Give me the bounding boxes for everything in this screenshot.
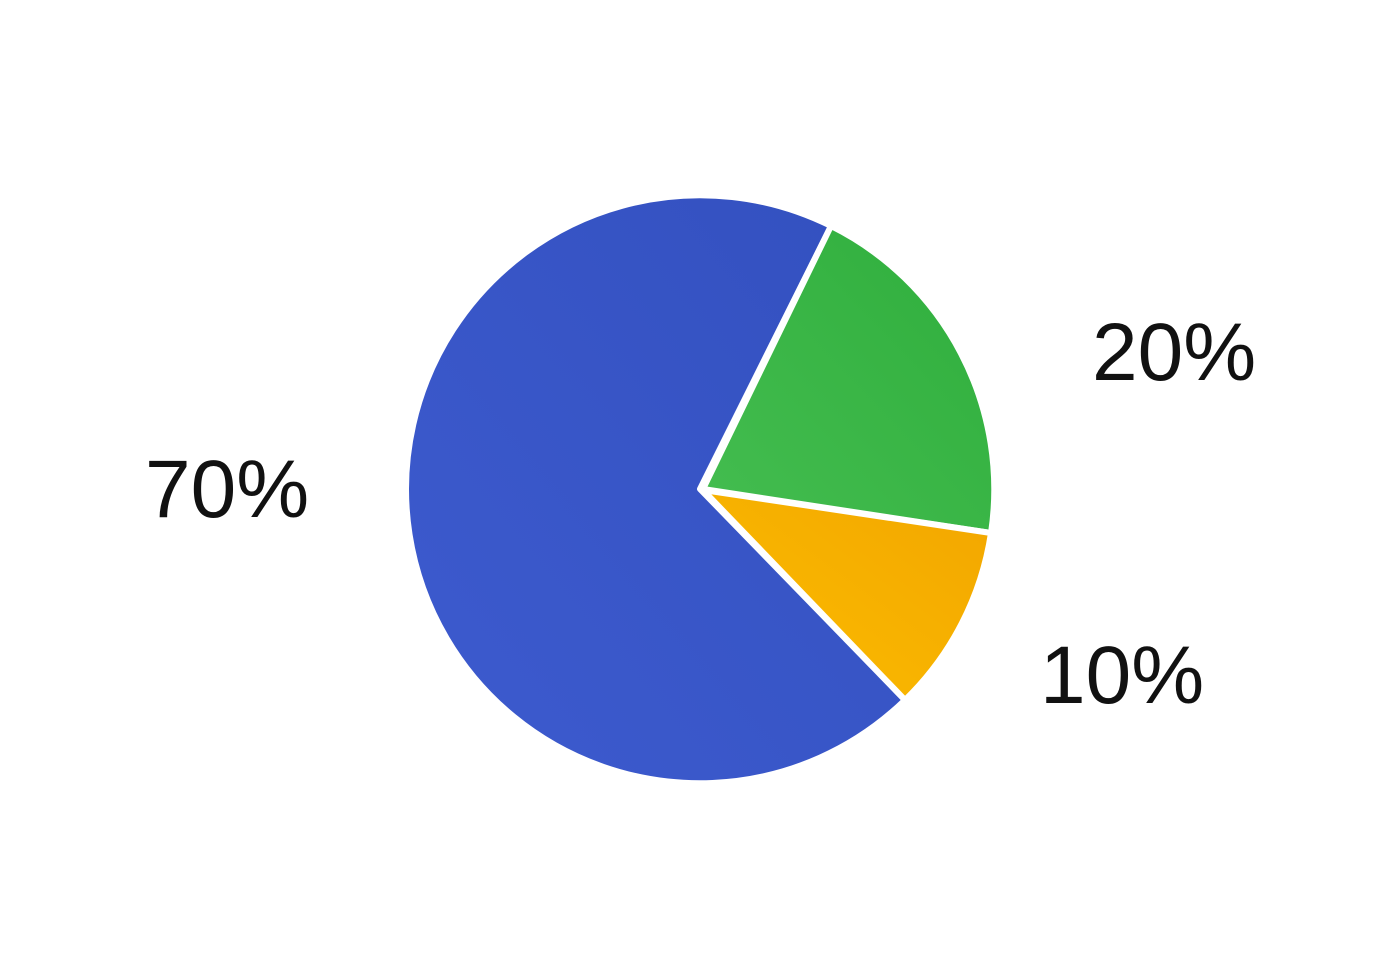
slice: 70% blue <box>406 195 905 783</box>
label: 20%: 20% <box>1092 307 1256 398</box>
label: 70%: 70% <box>145 444 309 535</box>
slice: 10% yellow <box>703 490 991 700</box>
label: 10%: 10% <box>1040 630 1204 721</box>
slice: 20% green <box>703 226 994 533</box>
